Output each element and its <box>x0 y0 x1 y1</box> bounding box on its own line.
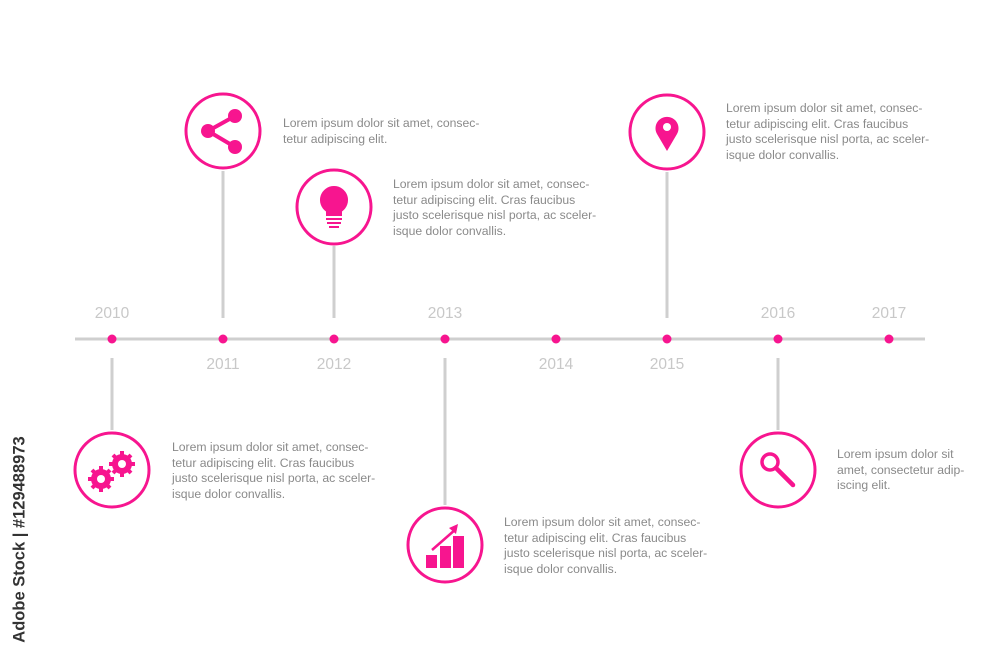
text: 2015 <box>650 356 684 373</box>
text: 2017 <box>872 305 906 322</box>
year labels <box>95 305 906 373</box>
text: gears: tetur adipiscing elit. Cras faucibus <box>172 456 354 470</box>
icon: chart <box>408 508 482 582</box>
text: share <box>283 116 479 146</box>
text: pin: justo scelerisque nisl porta, ac sceler- <box>726 132 929 146</box>
icon: pin <box>630 95 704 169</box>
text: pin <box>726 101 929 162</box>
icon: magnifier <box>741 433 815 507</box>
watermark id: Adobe Stock | #129488973 <box>10 436 28 643</box>
text: 2016 <box>761 305 795 322</box>
text: share: tetur adipiscing elit. <box>283 132 387 146</box>
text: chart: tetur adipiscing elit. Cras faucibus <box>504 530 686 544</box>
text: pin: Lorem ipsum dolor sit amet, consec- <box>726 101 922 115</box>
text: gears: Lorem ipsum dolor sit amet, consec- <box>172 440 368 454</box>
text: magnifier: Lorem ipsum dolor sit <box>837 447 954 461</box>
text: chart <box>504 515 707 576</box>
text: magnifier: iscing elit. <box>837 478 891 492</box>
text: 2011 <box>206 356 240 373</box>
text: bulb: justo scelerisque nisl porta, ac sceler- <box>393 208 596 222</box>
text: bulb: Lorem ipsum dolor sit amet, consec- <box>393 177 589 191</box>
text: 2014 <box>539 356 573 373</box>
text: pin: tetur adipiscing elit. Cras faucibus <box>726 116 908 130</box>
text: bulb: tetur adipiscing elit. Cras faucibus <box>393 192 575 206</box>
text: 2010 <box>95 305 129 322</box>
text: bulb: isque dolor convallis. <box>393 224 506 238</box>
text: magnifier <box>837 447 964 492</box>
icon: bulb <box>297 170 371 244</box>
text: chart: isque dolor convallis. <box>504 562 617 576</box>
text: share: Lorem ipsum dolor sit amet, consec- <box>283 116 479 130</box>
timeline axis <box>75 334 925 344</box>
text: magnifier: amet, consectetur adip- <box>837 462 964 476</box>
text: bulb <box>392 177 596 238</box>
text: pin: isque dolor convallis. <box>726 148 839 162</box>
icon: share <box>186 94 260 168</box>
icon: gears <box>75 433 149 507</box>
text: gears: justo scelerisque nisl porta, ac sceler- <box>172 471 375 485</box>
text: chart: Lorem ipsum dolor sit amet, consec- <box>504 515 700 529</box>
text: gears: isque dolor convallis. <box>172 486 285 500</box>
text: chart: justo scelerisque nisl porta, ac sceler- <box>504 546 707 560</box>
text: gears <box>172 440 375 500</box>
text: 2012 <box>317 356 351 373</box>
text: 2013 <box>428 305 462 322</box>
